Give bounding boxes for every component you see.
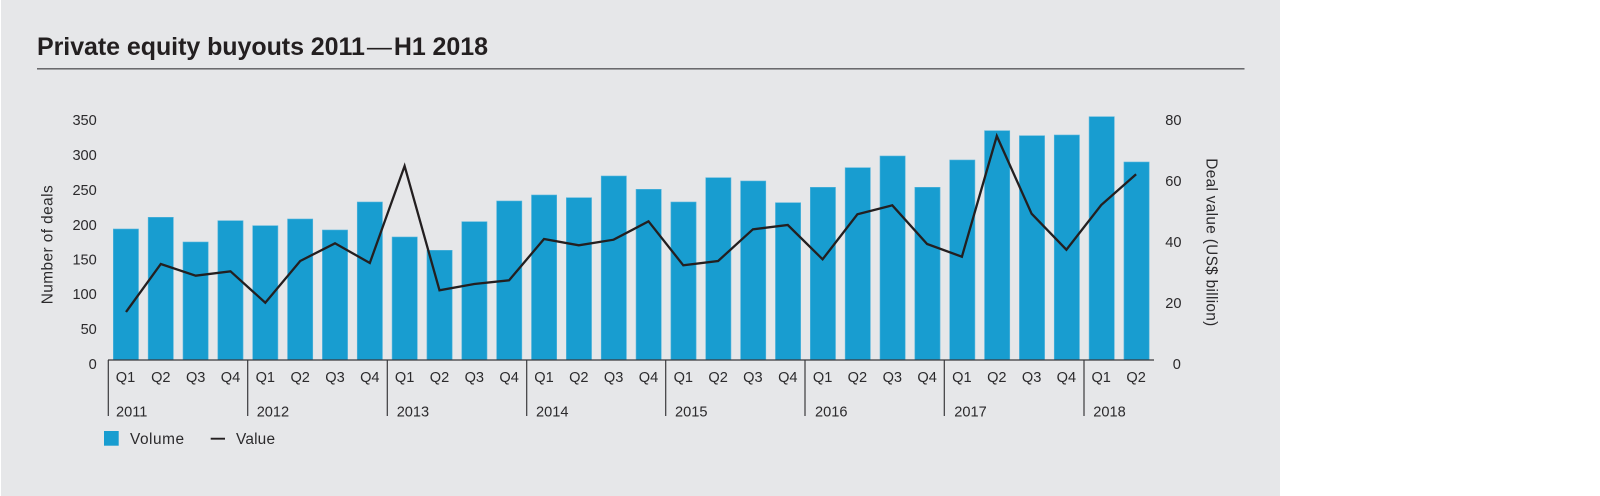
x axis quarter labels: Q4 [639, 370, 658, 386]
x axis quarter labels: Q3 [1022, 370, 1041, 386]
left axis tick labels: 100 [72, 287, 97, 303]
x axis year labels: 2017 [954, 404, 987, 420]
legend [104, 431, 275, 448]
x axis quarter labels: Q1 [952, 370, 972, 386]
x axis quarter labels: Q2 [708, 370, 728, 386]
x axis quarter labels: Q1 [395, 370, 414, 386]
bar chart: volume [113, 117, 1149, 360]
x axis quarter labels: Q1 [674, 370, 693, 386]
x axis quarter labels: Q4 [360, 370, 380, 386]
x axis quarter labels: Q2 [151, 370, 171, 386]
line chart: value [126, 136, 1136, 312]
x axis quarter labels: Q3 [604, 370, 623, 386]
right axis tick labels: 40 [1165, 235, 1182, 251]
x axis quarter labels: Q2 [1126, 370, 1146, 386]
title: Private equity buyouts 2011 — H1 2018 [37, 33, 488, 61]
x axis year labels: 2015 [675, 404, 707, 420]
right axis title: Deal value (US$ billion) [1202, 158, 1219, 326]
x axis quarter labels: Q3 [883, 370, 902, 386]
left axis tick labels: 350 [72, 113, 97, 129]
legend: value line [211, 438, 225, 440]
x axis year labels: 2018 [1093, 404, 1126, 420]
x axis quarter labels: Q2 [569, 370, 589, 386]
right axis tick labels: 0 [1173, 357, 1181, 373]
left axis tick labels: 250 [72, 183, 97, 199]
x axis year labels: 2016 [815, 404, 847, 420]
x axis quarter labels: Q3 [465, 370, 484, 386]
x axis quarter labels: Q3 [743, 370, 763, 386]
x axis quarter labels: Q4 [499, 370, 519, 386]
right axis tick labels: 80 [1165, 113, 1182, 129]
right axis tick labels [1165, 113, 1182, 373]
right axis tick labels: 20 [1165, 296, 1182, 312]
x axis quarter labels [116, 370, 1146, 386]
legend: volume swatch [104, 431, 119, 446]
x axis quarter labels: Q2 [987, 370, 1007, 386]
left axis tick labels: 0 [89, 357, 97, 373]
left axis tick labels: 150 [72, 252, 97, 268]
x axis quarter labels: Q4 [917, 370, 937, 386]
x axis quarter labels: Q1 [1091, 370, 1111, 386]
x axis year labels: 2011 [116, 404, 147, 420]
x axis quarter labels: Q4 [1057, 370, 1076, 386]
x axis year labels [116, 404, 1126, 420]
x axis with year dividers [108, 360, 1154, 416]
x axis year labels: 2014 [536, 404, 568, 420]
left axis tick labels [72, 113, 97, 373]
x axis quarter labels: Q1 [256, 370, 275, 386]
x axis quarter labels: Q2 [430, 370, 449, 386]
right axis tick labels: 60 [1165, 174, 1182, 190]
x axis year labels: 2013 [397, 404, 429, 420]
left axis tick labels: 200 [72, 218, 97, 234]
x axis quarter labels: Q2 [848, 370, 867, 386]
x axis quarter labels: Q2 [290, 370, 310, 386]
left axis tick labels: 300 [72, 148, 97, 164]
x axis year labels: 2012 [257, 404, 289, 420]
panel: chart background [1, 0, 1280, 496]
x axis quarter labels: Q3 [325, 370, 345, 386]
x axis quarter labels: Q1 [813, 370, 832, 386]
left axis title: Number of deals [40, 185, 57, 304]
legend: volume label: Volume [130, 431, 184, 448]
x axis quarter labels: Q3 [186, 370, 205, 386]
x axis quarter labels: Q4 [221, 370, 240, 386]
left axis tick labels: 50 [81, 322, 97, 338]
x axis quarter labels: Q4 [778, 370, 798, 386]
x axis quarter labels: Q1 [534, 370, 554, 386]
x axis quarter labels: Q1 [116, 370, 135, 386]
legend: value label: Value [236, 431, 275, 448]
